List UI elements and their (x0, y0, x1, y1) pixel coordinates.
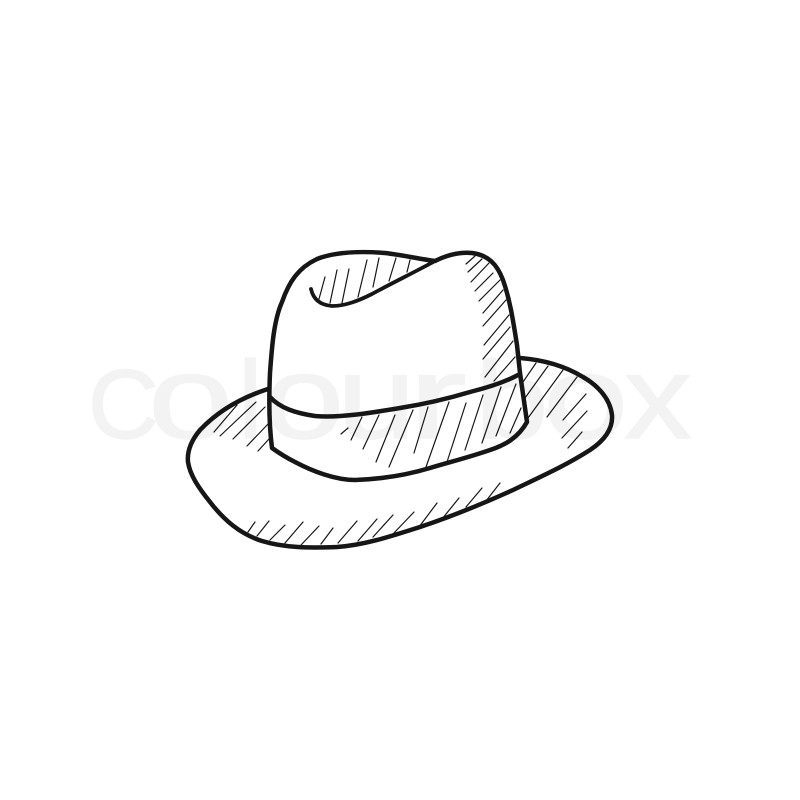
watermark text: o (543, 331, 628, 463)
watermark text: o (148, 331, 233, 463)
watermark text: u (337, 331, 416, 463)
hatching: crown base (341, 384, 521, 467)
watermark text: x (624, 331, 692, 463)
hat band (270, 375, 518, 416)
watermark text: o (264, 331, 344, 463)
watermark text (88, 331, 692, 463)
watermark text: l (238, 339, 262, 462)
hat crown outline (269, 252, 527, 480)
hatching: brim bottom (248, 483, 500, 545)
watermark text: b (475, 338, 548, 462)
hatching: crown right side (466, 256, 515, 381)
watermark text: r (408, 331, 467, 463)
crown dent (311, 261, 435, 306)
hatching: dent (319, 258, 410, 303)
hat brim outline (188, 358, 612, 547)
hatching: brim left (214, 402, 269, 451)
hatching: brim right (523, 363, 587, 448)
icon: hat (188, 252, 612, 547)
watermark text: C (88, 349, 159, 459)
